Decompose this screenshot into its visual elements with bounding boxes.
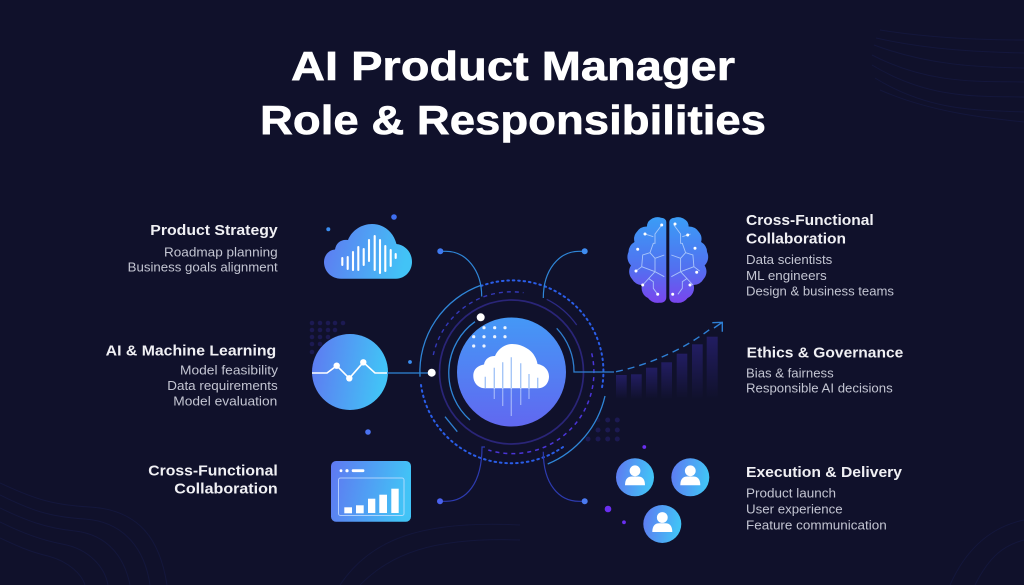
text block: execution and delivery: Execution & Delivery <box>746 464 903 481</box>
text block: cross-functional collaboration right: ML engineers <box>746 269 827 283</box>
decorative purple dots <box>605 445 646 524</box>
icon: person three <box>643 505 681 543</box>
dot grid left <box>310 321 345 354</box>
bar chart: growth <box>616 337 718 399</box>
text block: execution and delivery <box>746 464 903 532</box>
icon: people group <box>616 458 709 543</box>
hub: central cloud circle <box>457 318 566 426</box>
icon: waveform cloud <box>324 224 412 279</box>
hub rings <box>420 280 614 464</box>
arrow: growth trend <box>616 322 722 372</box>
text block: product strategy <box>128 222 278 274</box>
text block: ethics and governance <box>746 345 903 396</box>
text block: product strategy: Business goals alignment <box>128 260 278 274</box>
text block: cross-functional collaboration right <box>746 212 894 299</box>
icon: pulse circle <box>312 334 388 410</box>
text block: cross-functional collaboration right: Collaboration <box>746 230 846 247</box>
dot grid right <box>586 418 620 442</box>
title: Role & Responsibilities <box>260 97 766 143</box>
icon: person one <box>616 458 654 496</box>
connector: top right <box>543 248 588 298</box>
text block: ai and machine learning <box>106 343 279 409</box>
text block: cross-functional collaboration right: Data scientists <box>746 253 832 267</box>
text block: product strategy: Product Strategy <box>150 222 278 239</box>
text block: ethics and governance: Ethics & Governance <box>747 345 903 362</box>
text block: cross-functional collaboration right: Cross-Functional <box>746 212 874 229</box>
connector: bottom left <box>437 447 485 504</box>
white node on hub ring <box>477 313 485 321</box>
text block: ai and machine learning: Model feasibility <box>180 363 279 377</box>
text block: ethics and governance: Responsible AI decisions <box>746 382 893 396</box>
connector: pulse to hub <box>387 360 436 377</box>
decorative dot above card <box>365 429 371 435</box>
text block: execution and delivery: Product launch <box>746 487 836 501</box>
text block: ai and machine learning: Data requirements <box>167 379 278 393</box>
text block: cross-functional collaboration right: Design & business teams <box>746 285 894 299</box>
title: AI Product Manager <box>291 43 735 89</box>
text block: ethics and governance: Bias & fairness <box>746 366 834 380</box>
title <box>260 43 766 143</box>
text block: execution and delivery: Feature communication <box>746 518 887 532</box>
text block: cross-functional collaboration left: Collaboration <box>174 480 278 497</box>
text block: product strategy: Roadmap planning <box>164 246 278 260</box>
text block: ai and machine learning: Model evaluation <box>173 395 277 409</box>
text block: cross-functional collaboration left <box>148 463 278 497</box>
text block: cross-functional collaboration left: Cross-Functional <box>148 463 278 480</box>
text block: ai and machine learning: AI & Machine Learning <box>106 343 276 360</box>
text block: execution and delivery: User experience <box>746 503 843 517</box>
icon: dashboard card <box>331 461 411 522</box>
connector: top left <box>437 248 482 296</box>
icon: brain <box>627 217 708 303</box>
connector: bottom right <box>543 452 588 504</box>
decorative dots near cloud <box>326 214 397 231</box>
icon: person two <box>671 458 709 496</box>
